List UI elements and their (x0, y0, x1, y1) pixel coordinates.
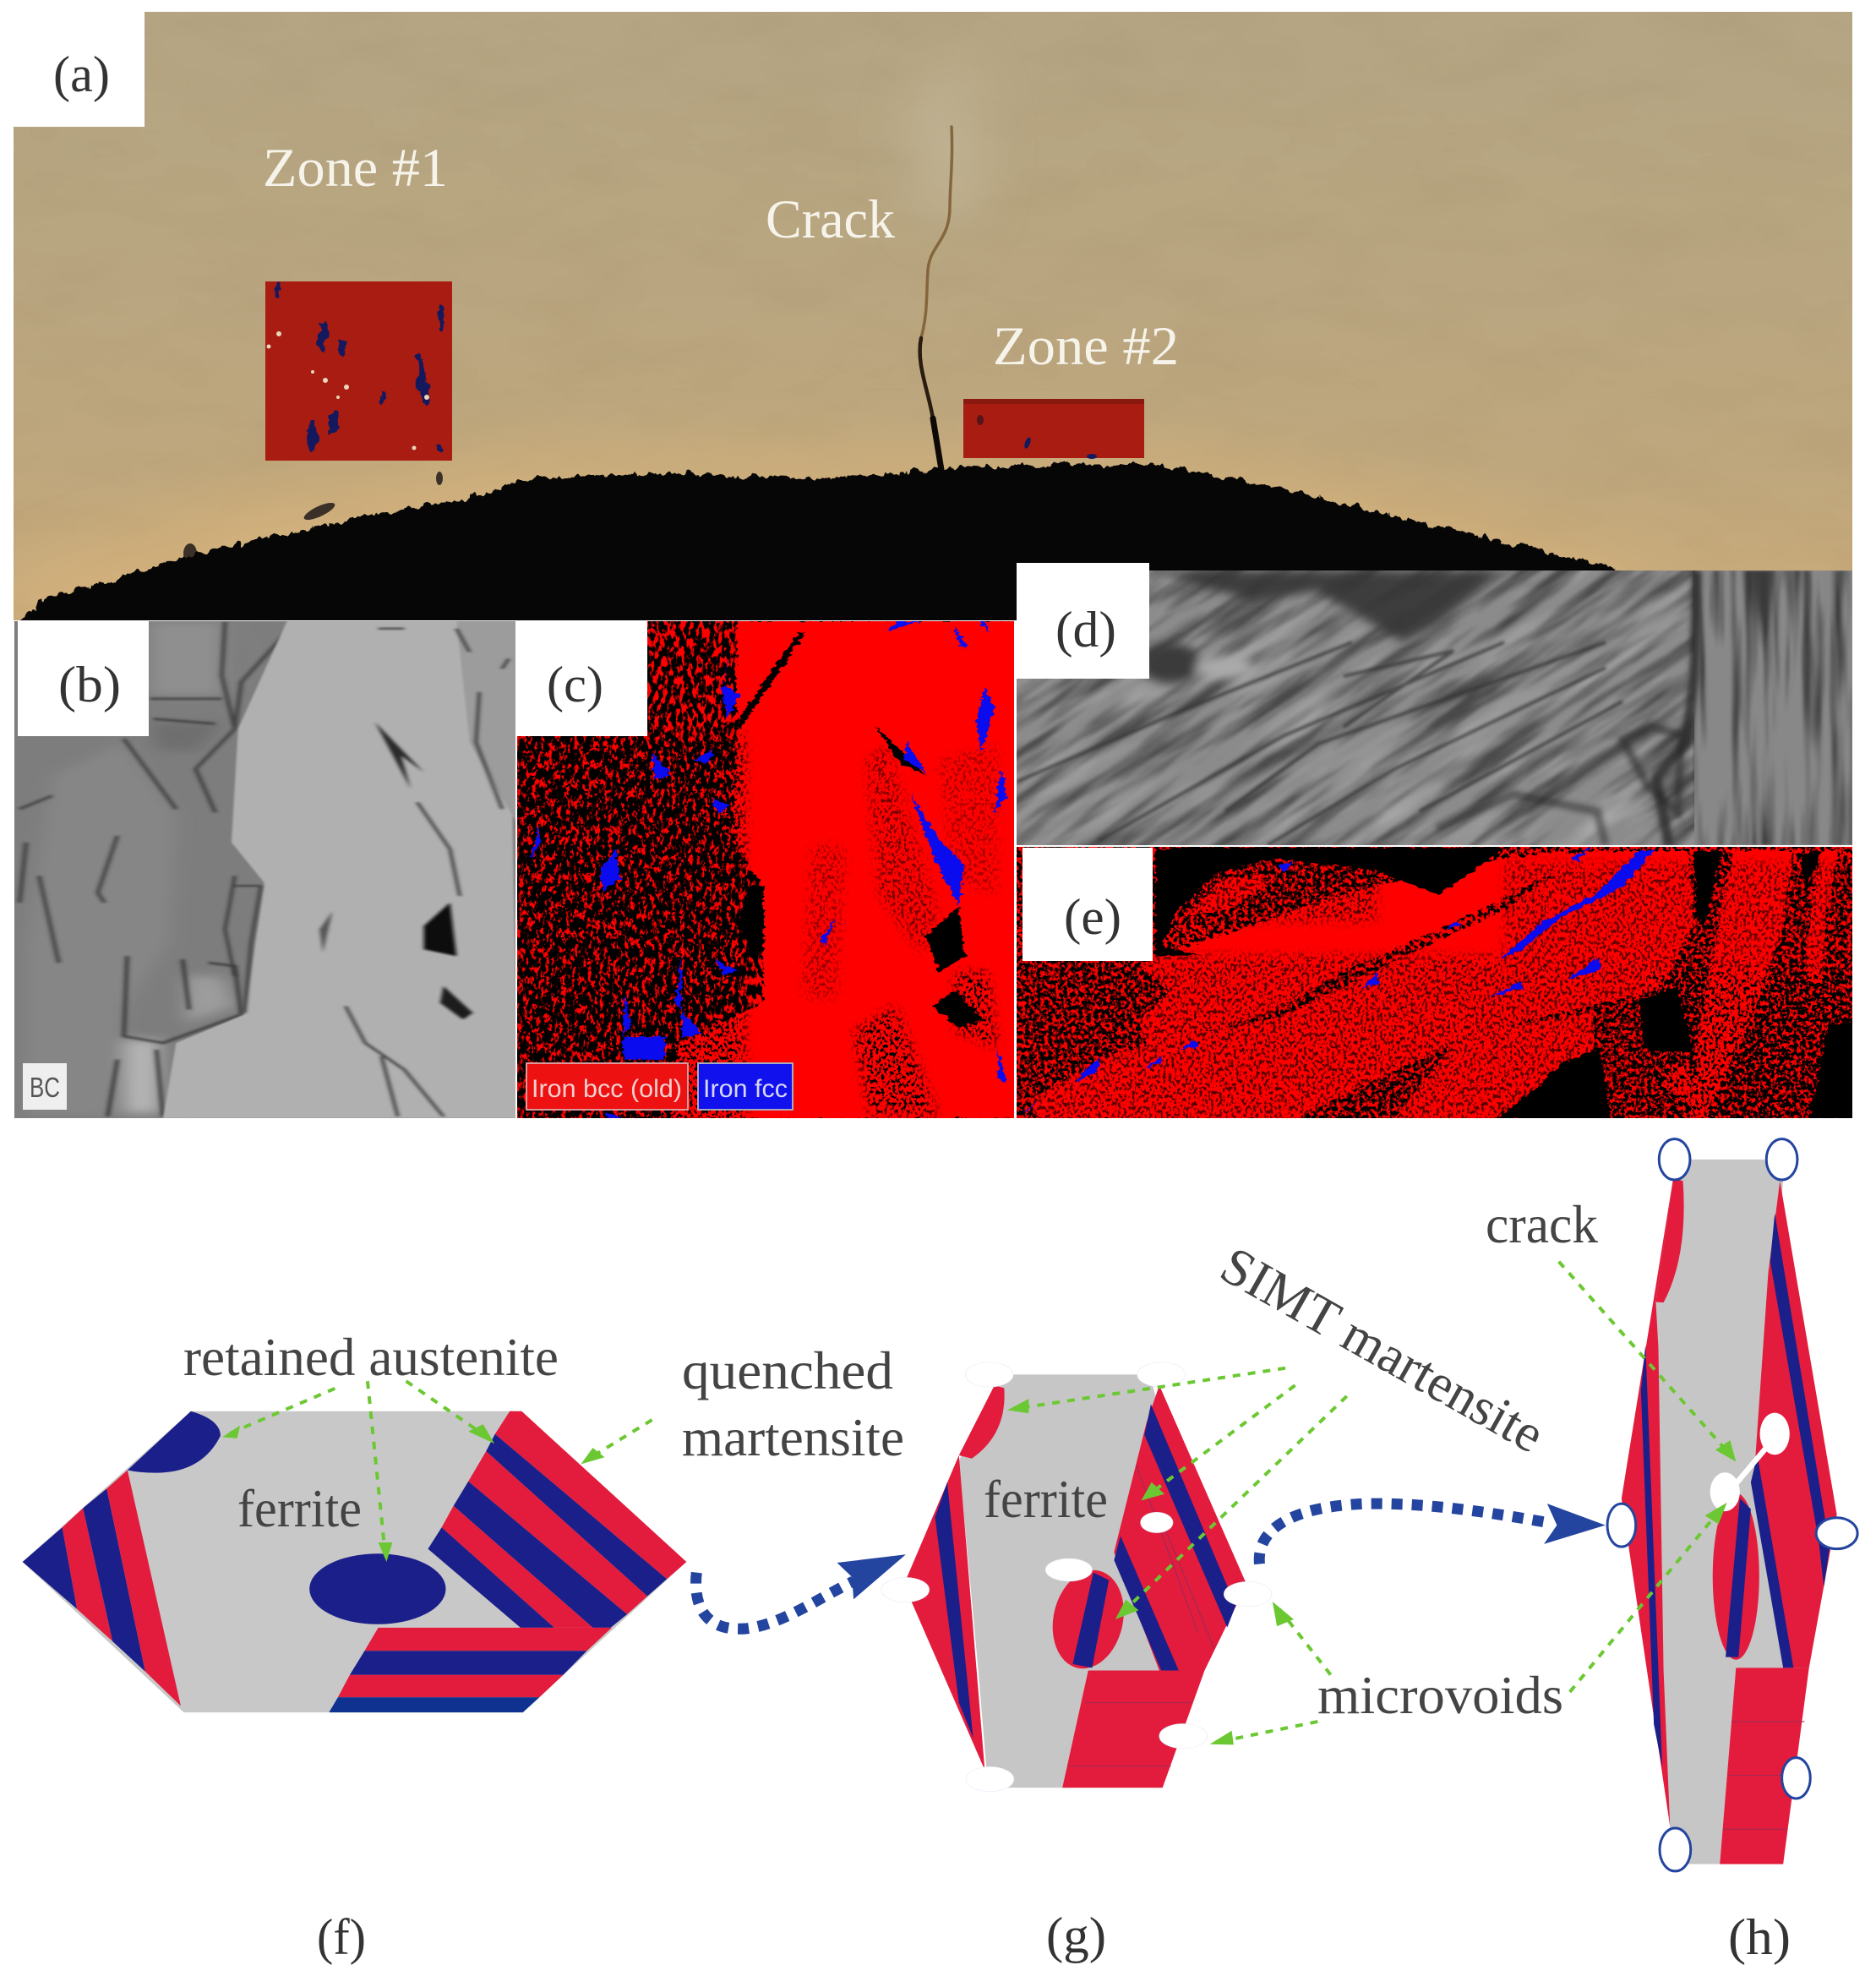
schematic g: strained microstructure (881, 1362, 1347, 1792)
martensite lath lines (1723, 1722, 1804, 1829)
tag (e) (1023, 848, 1153, 961)
schematic f: initial microstructure (23, 1381, 686, 1712)
left martensite wedge (1622, 1178, 1673, 1826)
legend: Iron bcc (526, 1063, 688, 1110)
lighter edge halo (81, 77, 1562, 587)
right blue stripes (1751, 1213, 1830, 1668)
dark upper shadow (1140, 570, 1504, 684)
left martensite stripes (23, 1471, 181, 1706)
label box BC: BC (30, 1072, 60, 1103)
panel d: band contrast map (695, 13, 1876, 1421)
lower martensite (1062, 1670, 1204, 1788)
retained austenite corner (128, 1411, 221, 1473)
dark features in the bright grain (225, 629, 509, 1116)
label: martensite: martensite (682, 1408, 904, 1467)
dark tear-outs near the edge (183, 472, 443, 564)
black base (1017, 847, 1852, 1118)
blue austenite stringers (1019, 848, 1655, 1115)
lower martensite stripes (329, 1628, 612, 1712)
tag (g): (g) (1046, 1908, 1106, 1963)
solid red ferrite grain (672, 621, 1017, 1118)
right martensite wedge (1754, 1181, 1837, 1668)
EBSD inset zone 2 (963, 399, 1144, 459)
martensite lath lines (1067, 1466, 1214, 1766)
label: ferrite (f): ferrite (237, 1479, 362, 1538)
tag (c): (c) (547, 657, 603, 712)
label box BC (23, 1063, 67, 1110)
label: microvoids: microvoids (1317, 1666, 1563, 1725)
EBSD inset zone 1 (265, 281, 452, 461)
panel a: macrograph with crack (8, 12, 1852, 642)
upper right martensite stripes (428, 1411, 686, 1628)
right martensite wedge (1114, 1385, 1246, 1670)
central SIMT island (1713, 1493, 1759, 1660)
schematic h: cracked microstructure (1559, 1139, 1857, 1871)
label: crack: crack (1486, 1195, 1598, 1254)
lath boundary lines (1017, 642, 1622, 845)
grey base (1017, 570, 1852, 845)
legend: Iron bcc: Iron bcc (old) (532, 1075, 682, 1103)
green microvoids pointer (1570, 1503, 1727, 1692)
lighter left grains (26, 622, 235, 1116)
green pointer arrows (1007, 1368, 1347, 1744)
tag (d): (d) (1055, 602, 1116, 658)
label: Crack: Crack (766, 189, 895, 250)
label: Zone #1: Zone #1 (263, 138, 448, 199)
label: quenched: quenched (682, 1341, 893, 1400)
green pointer arrows (222, 1381, 652, 1562)
retained austenite island (309, 1553, 446, 1624)
legend: Iron fcc: Iron fcc (703, 1075, 788, 1103)
crack line (920, 127, 952, 470)
lower martensite (1720, 1668, 1809, 1864)
ferrite body (1650, 1160, 1793, 1864)
tag (e): (e) (1064, 889, 1121, 945)
red speckle (1017, 847, 1852, 1118)
black background below sample (20, 461, 1616, 620)
right blue stripes (1114, 1404, 1235, 1670)
arrow f to g (696, 1554, 906, 1629)
tag (f): (f) (317, 1909, 366, 1965)
top left martensite island (959, 1385, 1005, 1459)
bright ferrite grain (163, 621, 519, 1118)
label: SIMT martensite: SIMT martensite (1211, 1235, 1554, 1464)
tag (h): (h) (1728, 1909, 1791, 1965)
tag (c) (515, 621, 647, 736)
crack with linked voids (1710, 1413, 1790, 1511)
outlined microvoids (1607, 1139, 1857, 1871)
tag (a): (a) (53, 46, 110, 102)
black voids (1155, 848, 1855, 1119)
green crack pointer (1559, 1262, 1736, 1462)
panel c: phase map (517, 621, 1017, 1118)
ferrite body (959, 1374, 1166, 1788)
grey base (14, 621, 515, 1118)
red speckle (517, 621, 1014, 1118)
dark grain boundary (1437, 570, 1697, 845)
top left martensite island (1655, 1178, 1684, 1302)
label: ferrite (g): ferrite (984, 1470, 1108, 1529)
label: retained austenite: retained austenite (183, 1328, 559, 1387)
arrow g to h (1259, 1504, 1606, 1564)
central SIMT island (1045, 1566, 1131, 1673)
black features and blue austenite (532, 621, 1007, 1118)
dark grain boundaries, left (19, 622, 293, 1116)
left blue stripe (1641, 1345, 1662, 1767)
left martensite wedge (904, 1455, 984, 1770)
solid red laths (1028, 851, 1839, 1119)
surface mottling (14, 12, 1852, 620)
black speckle over the grain boundaries (517, 621, 1014, 1118)
panel b: band contrast map (14, 621, 519, 1118)
ferrite hexagon (23, 1411, 686, 1712)
label: Zone #2: Zone #2 (993, 316, 1179, 377)
vertical lath grain at right (1693, 570, 1852, 845)
tag (a) (14, 12, 145, 127)
sample background (14, 12, 1852, 620)
diagonal lath texture (695, 13, 1876, 1421)
left-grain texture (14, 621, 515, 1118)
tag (b): (b) (58, 657, 121, 712)
tag (d) (1017, 563, 1149, 679)
left blue stripe (935, 1482, 973, 1738)
panel e: phase map (1017, 847, 1855, 1119)
black speckle on laths (1017, 847, 1852, 1118)
legend: Iron fcc (698, 1063, 793, 1110)
microvoids (881, 1362, 1272, 1792)
tag (b) (18, 621, 149, 736)
black base (517, 621, 1014, 1118)
